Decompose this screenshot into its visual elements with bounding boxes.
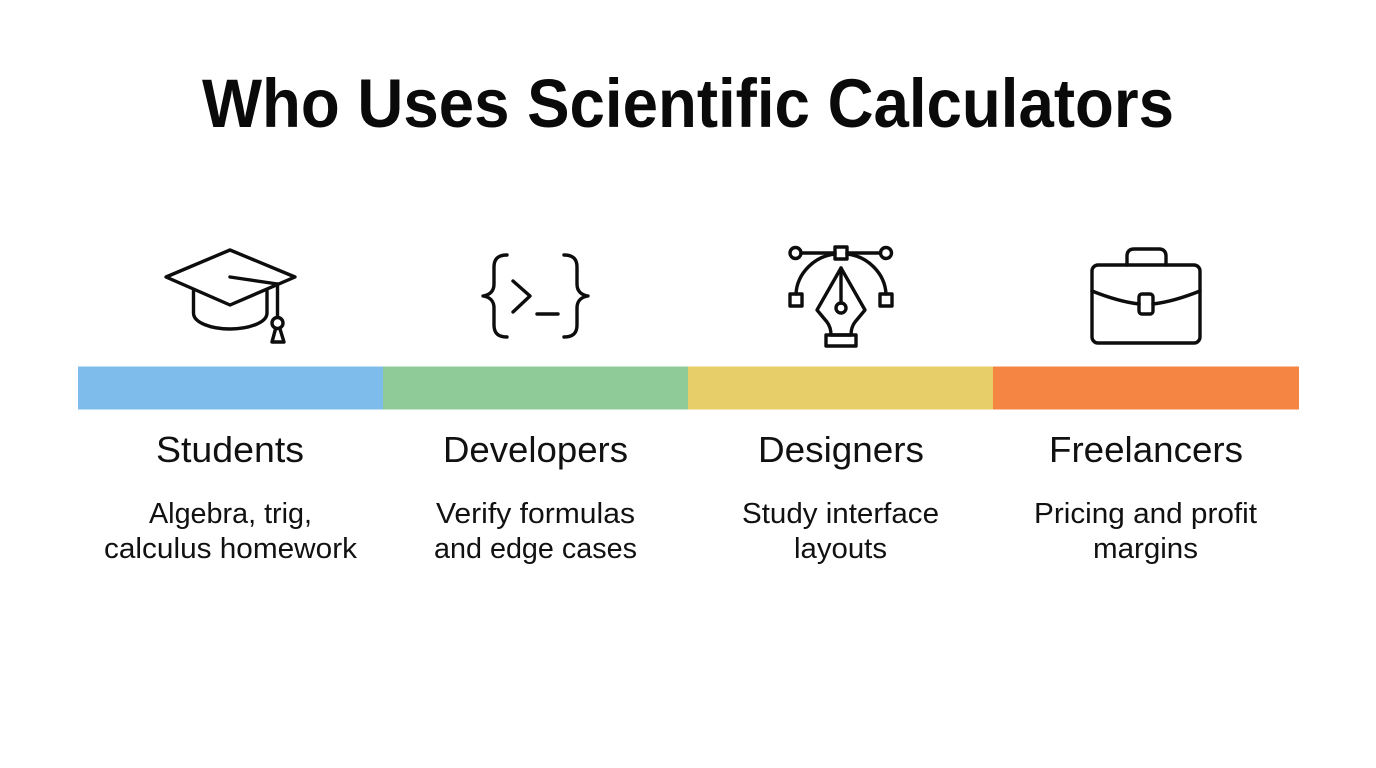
color bar [78,366,1299,410]
icon: graduation cap [166,250,295,342]
column: freelancers: margins [1093,533,1198,565]
column: freelancers: Pricing and profit [1034,498,1257,530]
column: designers: Designers [758,429,924,470]
column: freelancers [1034,429,1257,565]
column: designers: layouts [794,533,887,565]
column: students [104,429,358,565]
column: students: calculus homework [104,533,358,565]
column: developers [434,429,637,565]
title: Who Uses Scientific Calculators [202,65,1174,142]
column: students: Algebra, trig, [149,498,312,530]
icon: code braces with prompt [483,255,588,337]
column: developers: Developers [443,429,628,470]
icon: briefcase [1092,249,1200,343]
icon: pen tool with bezier handles [790,247,892,346]
column: developers: Verify formulas [436,498,635,530]
column: designers: Study interface [742,498,939,530]
column: students: Students [156,429,304,470]
column: developers: and edge cases [434,533,637,565]
column: designers [742,429,939,565]
column: freelancers: Freelancers [1049,429,1243,470]
